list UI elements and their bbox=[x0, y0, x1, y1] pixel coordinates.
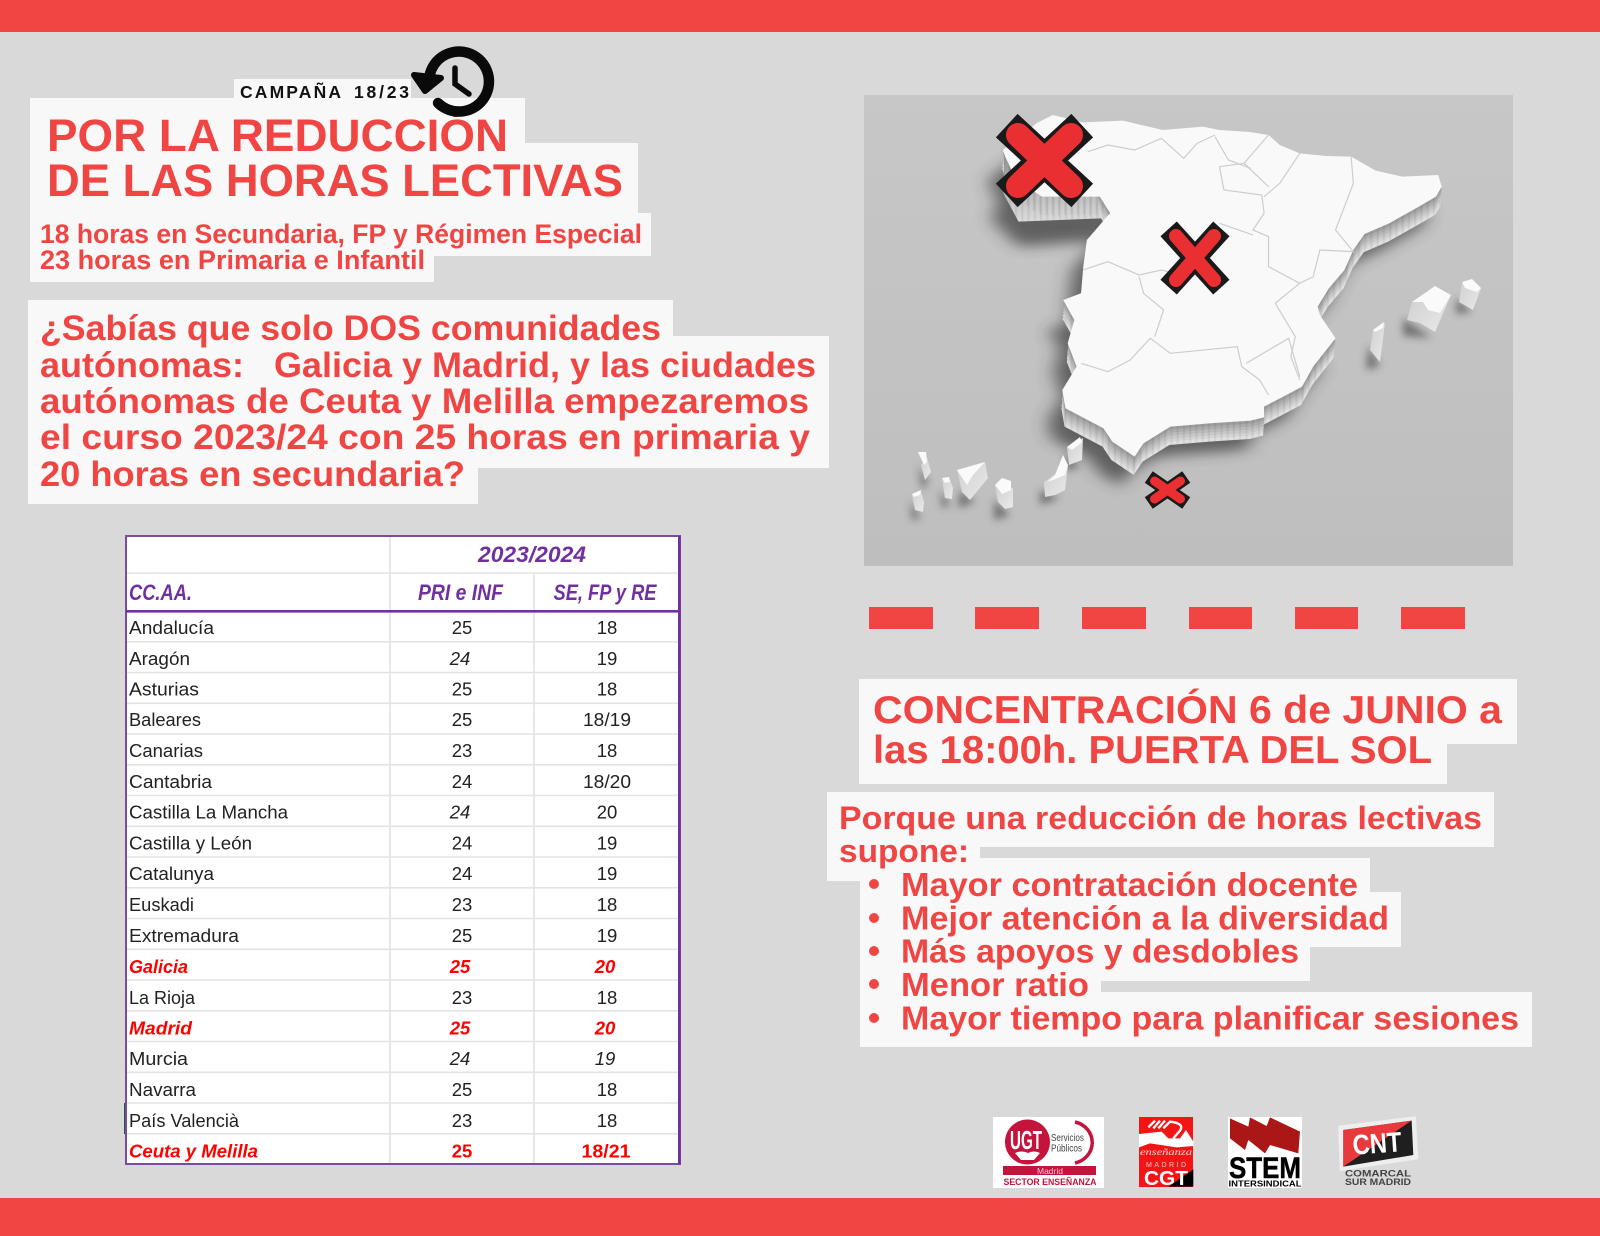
table rows: 18 bbox=[597, 678, 617, 700]
icon: red cross over Madrid bbox=[1176, 236, 1214, 280]
table rows: 18 bbox=[597, 1110, 617, 1131]
table rows: Andalucía bbox=[129, 617, 215, 638]
table rows: Asturias bbox=[129, 678, 199, 700]
logo: UGT Servicios Públicos bbox=[993, 1117, 1104, 1188]
table rows: Castilla y León bbox=[129, 832, 252, 854]
logo: UGT Servicios Públicos: Servicios bbox=[1051, 1132, 1084, 1144]
table header: SE, FP y RE bbox=[554, 580, 658, 605]
table rows: La Rioja bbox=[129, 987, 196, 1008]
table rows: Aragón bbox=[129, 648, 190, 669]
icon: red cross over Galicia bbox=[1018, 135, 1071, 186]
campaign label bbox=[234, 79, 411, 107]
table rows: 20 bbox=[597, 802, 617, 822]
table rows: 18 bbox=[597, 987, 617, 1008]
Balearic Islands bbox=[1370, 279, 1481, 362]
map of Spain with red crosses bbox=[864, 95, 1513, 566]
logo: CGT enseñanza Madrid bbox=[1139, 1117, 1193, 1190]
campaign label: CAMPAÑA bbox=[240, 81, 341, 102]
table rows: Catalunya bbox=[129, 863, 215, 884]
table rows: 24 bbox=[452, 832, 472, 854]
table rows: 24 bbox=[449, 648, 470, 669]
table rows: 20 bbox=[594, 956, 616, 977]
table rows: 18 bbox=[597, 617, 617, 638]
table rows: 24 bbox=[449, 1048, 470, 1069]
rally announcement: las 18:00h. PUERTA DEL SOL bbox=[873, 729, 1432, 772]
logo: CNT Comarcal Sur Madrid: SUR MADRID bbox=[1345, 1177, 1411, 1188]
table header bbox=[129, 542, 658, 605]
table rows: 25 bbox=[449, 1018, 471, 1038]
table rows: 24 bbox=[452, 771, 472, 792]
icon: clock with counter-clockwise arrow bbox=[414, 52, 489, 112]
table rows: 23 bbox=[452, 1110, 472, 1131]
table rows: 18 bbox=[597, 1079, 617, 1100]
table rows: 25 bbox=[452, 617, 472, 638]
island shadows bbox=[910, 298, 1472, 520]
table rows: Ceuta y Melilla bbox=[129, 1140, 258, 1162]
table rows: 19 bbox=[597, 863, 617, 884]
table rows: Cantabria bbox=[129, 771, 213, 792]
table rows: 25 bbox=[452, 1140, 472, 1162]
table rows: Baleares bbox=[129, 709, 201, 730]
table rows: Castilla La Mancha bbox=[129, 802, 289, 822]
table rows: Canarias bbox=[129, 740, 203, 761]
table rows: 18/21 bbox=[582, 1140, 630, 1162]
subtitle: teaching hours: 23 horas en Primaria e Infantil bbox=[40, 245, 425, 275]
bullet items bbox=[901, 867, 1519, 1038]
table rows: 18 bbox=[597, 894, 617, 915]
logo: CNT Comarcal Sur Madrid: COMARCAL bbox=[1345, 1168, 1411, 1180]
table rows: 23 bbox=[452, 740, 472, 761]
dashed red divider bbox=[869, 607, 1465, 629]
table rows: 24 bbox=[449, 802, 470, 822]
reasons intro bbox=[839, 800, 1482, 869]
logo: UGT Servicios Públicos: SECTOR ENSEÑANZA bbox=[1004, 1177, 1097, 1187]
question text block: autónomas: Galicia y Madrid, y las ciudades bbox=[40, 346, 816, 385]
rally announcement: CONCENTRACIÓN 6 de JUNIO a bbox=[873, 688, 1502, 732]
icon: red cross over Ceuta and Melilla bbox=[1154, 481, 1180, 499]
table rows: 25 bbox=[452, 678, 472, 700]
table rows: Madrid bbox=[129, 1018, 193, 1038]
table rows: 18 bbox=[597, 740, 617, 761]
top red bar bbox=[0, 0, 1600, 32]
table header: CC.AA. bbox=[129, 580, 192, 605]
logo: STEM Intersindical bbox=[1228, 1117, 1302, 1188]
question text block bbox=[28, 300, 829, 504]
table: teaching hours by region 2023/2024 bbox=[124, 536, 681, 1164]
bullet items: Mejor atención a la diversidad bbox=[901, 900, 1389, 938]
title text: DE LAS HORAS LECTIVAS bbox=[47, 155, 623, 206]
bottom red bar bbox=[0, 1198, 1600, 1236]
logo: UGT Servicios Públicos: UGT bbox=[1010, 1125, 1042, 1155]
campaign label: 18/23 bbox=[354, 82, 409, 102]
map shadow bbox=[989, 145, 1427, 487]
table rows: 23 bbox=[452, 894, 472, 915]
table rows: Euskadi bbox=[129, 894, 194, 915]
rally announcement bbox=[859, 679, 1517, 784]
title text: POR LA REDUCCIÓN bbox=[47, 110, 508, 161]
map extrusion bbox=[1002, 118, 1442, 475]
map top surface bbox=[1003, 115, 1442, 457]
table rows: Galicia bbox=[129, 956, 188, 977]
question text block: ¿Sabías que solo DOS comunidades bbox=[40, 309, 661, 348]
bullets bbox=[869, 879, 879, 1023]
table rows: 19 bbox=[595, 1048, 615, 1069]
subtitle: teaching hours: 18 horas en Secundaria, FP y Régimen Especial bbox=[40, 219, 642, 249]
logo: STEM Intersindical: INTERSINDICAL bbox=[1228, 1178, 1302, 1188]
table rows: 19 bbox=[597, 925, 617, 946]
title block bbox=[30, 98, 638, 213]
logo: UGT Servicios Públicos: Públicos bbox=[1051, 1142, 1082, 1154]
table rows: 19 bbox=[597, 832, 617, 854]
table header: 2023/2024 bbox=[477, 542, 586, 567]
table rows: 25 bbox=[452, 709, 472, 730]
table rows: Navarra bbox=[129, 1079, 197, 1100]
table rows: 20 bbox=[594, 1018, 616, 1038]
logo: UGT Servicios Públicos: Madrid bbox=[1037, 1166, 1063, 1176]
bullet items: Mayor contratación docente bbox=[901, 867, 1358, 904]
bullet items: Mayor tiempo para planificar sesiones bbox=[901, 1000, 1519, 1038]
question text block: el curso 2023/24 con 25 horas en primaria y bbox=[40, 418, 811, 457]
logo: STEM Intersindical: STEM bbox=[1229, 1152, 1301, 1185]
reasons intro: Porque una reducción de horas lectivas bbox=[839, 800, 1482, 836]
bullet items: Menor ratio bbox=[901, 967, 1089, 1004]
question text block: 20 horas en secundaria? bbox=[40, 455, 465, 494]
logo: CGT enseñanza Madrid: enseñanza bbox=[1140, 1148, 1192, 1158]
Canary Islands bbox=[912, 437, 1083, 512]
table header: PRI e INF bbox=[418, 580, 503, 605]
table rows: 18/19 bbox=[583, 709, 631, 730]
logo: CGT enseñanza Madrid: MADRID bbox=[1146, 1162, 1186, 1169]
table rows bbox=[129, 617, 631, 1162]
table rows: Extremadura bbox=[129, 925, 240, 946]
table rows: 18/20 bbox=[583, 771, 631, 792]
question text block: autónomas de Ceuta y Melilla empezaremos bbox=[40, 382, 809, 421]
table rows: 23 bbox=[452, 987, 472, 1008]
subtitle: teaching hours bbox=[30, 213, 651, 282]
table rows: 25 bbox=[449, 956, 471, 977]
table rows: 25 bbox=[452, 1079, 472, 1100]
table rows: Murcia bbox=[129, 1048, 189, 1069]
table rows: 25 bbox=[452, 925, 472, 946]
logo: CGT enseñanza Madrid: CGT bbox=[1144, 1168, 1188, 1190]
table rows: País Valencià bbox=[129, 1110, 240, 1131]
title text bbox=[47, 110, 623, 206]
logo: CNT Comarcal Sur Madrid: CNT bbox=[1352, 1126, 1403, 1161]
table rows: 19 bbox=[597, 648, 617, 669]
reasons intro: supone: bbox=[839, 833, 969, 869]
reasons list bbox=[827, 792, 1532, 1047]
logo: CNT Comarcal Sur Madrid bbox=[1339, 1117, 1417, 1188]
table rows: 24 bbox=[452, 863, 472, 884]
bullet items: Más apoyos y desdobles bbox=[901, 934, 1299, 970]
region borders bbox=[1081, 135, 1353, 395]
